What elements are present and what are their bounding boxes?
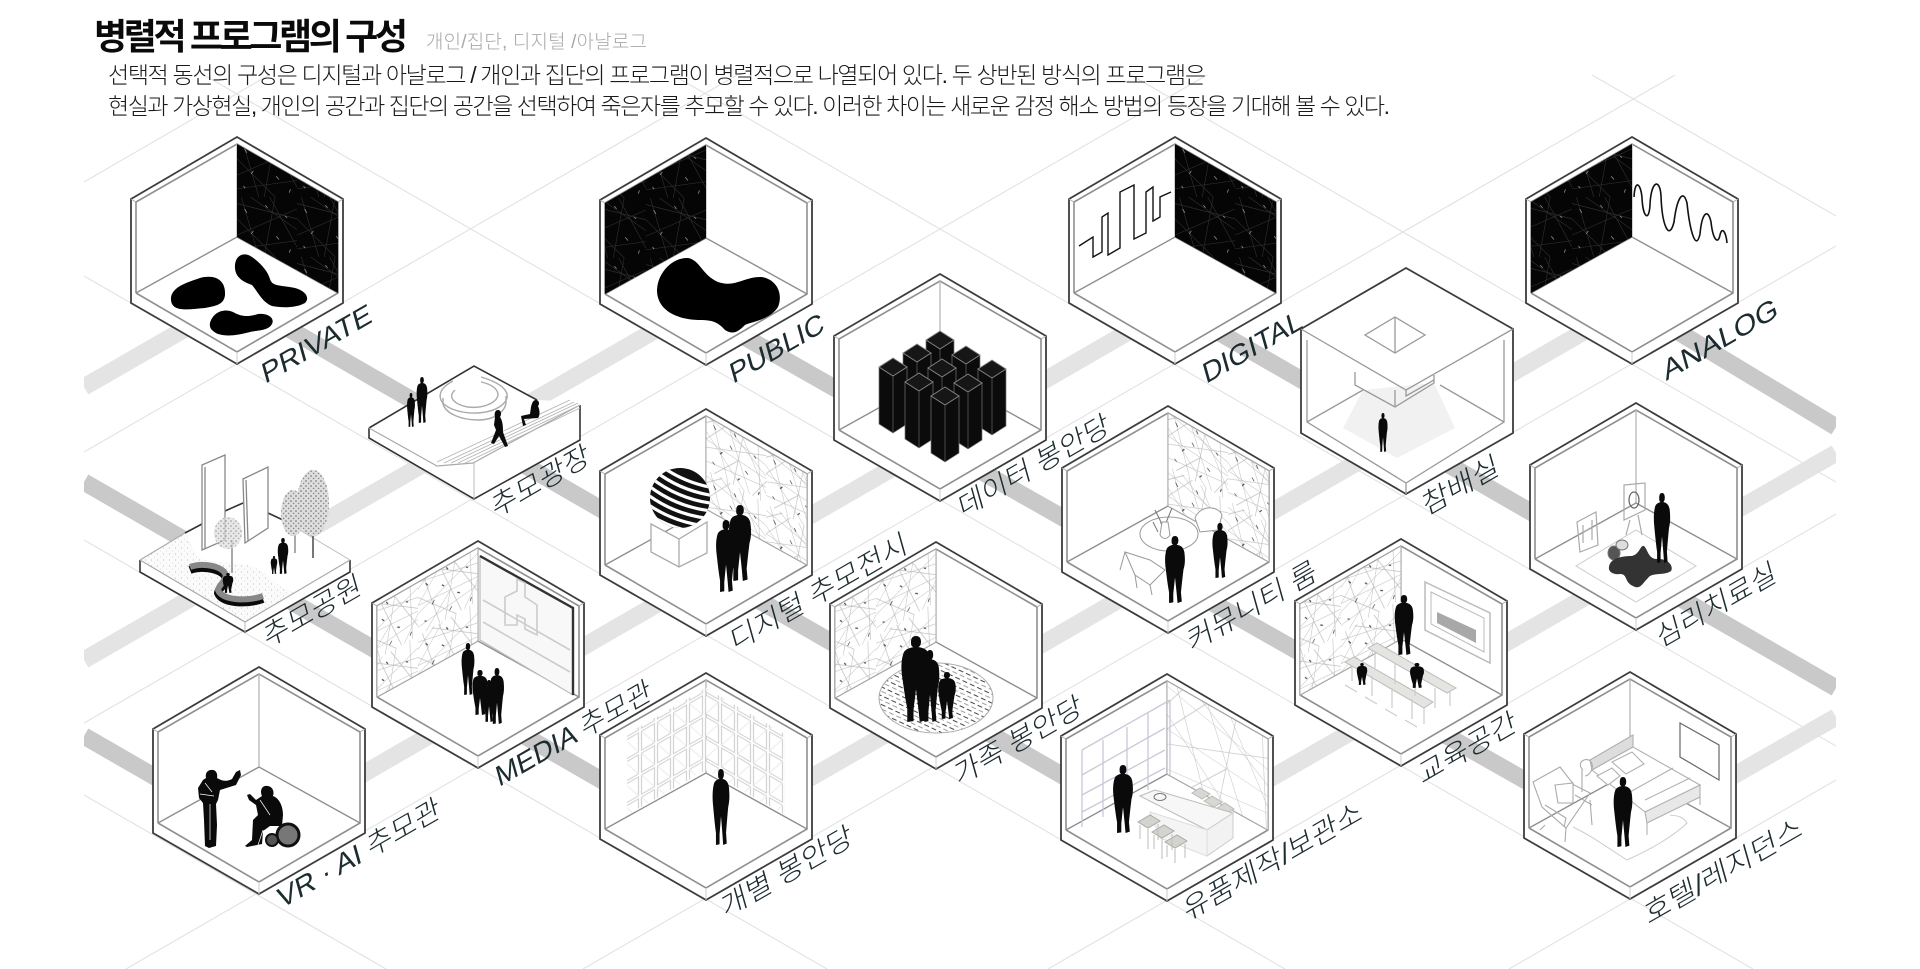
trees [214, 470, 329, 573]
panel: PRIVATE [131, 137, 375, 390]
panel: 호텔/레지던스 [1524, 672, 1806, 931]
ink puddle [1609, 546, 1672, 587]
panel: 추모광장 [369, 366, 593, 524]
panel: 유품제작/보관소 [1061, 674, 1365, 927]
figure: person in wheelchair [245, 786, 299, 847]
furniture [1120, 508, 1222, 595]
description text [108, 62, 1390, 119]
label: 데이터 봉안당 [955, 408, 1113, 524]
curved bench [190, 565, 263, 602]
rug [1573, 815, 1687, 860]
figure [1654, 493, 1670, 563]
media screen [480, 556, 573, 695]
bed [1590, 735, 1700, 835]
patterned floor circle [879, 663, 993, 733]
label: PRIVATE [258, 297, 375, 390]
circulation bands: light, rising to the right [84, 327, 1836, 786]
panel: 추모공원 [140, 455, 365, 654]
rug [1576, 530, 1696, 602]
icon: digital square wave [1079, 185, 1171, 257]
panel: VR · AI 추모관 [153, 667, 444, 915]
label: 커뮤니티 룸 [1184, 554, 1320, 658]
circular monument [440, 377, 507, 420]
label: 심리치료실 [1653, 556, 1779, 654]
figures [407, 377, 540, 447]
figures [1357, 595, 1424, 688]
panel: ANALOG [1526, 137, 1781, 387]
panel: 심리치료실 [1530, 403, 1779, 654]
figures [716, 505, 751, 592]
subtitle: 개인/집단, 디지털 /아날로그 [426, 31, 647, 53]
label: 호텔/레지던스 [1641, 811, 1806, 931]
panel: 교육공간 [1295, 539, 1520, 791]
wall board [1425, 582, 1490, 663]
work table and stools [1138, 788, 1234, 863]
title: 병렬적 프로그램의 구성 [94, 16, 408, 57]
label: 추모광장 [488, 438, 593, 524]
panel: MEDIA 추모관 [372, 541, 655, 793]
panel: 참배실 [1301, 268, 1513, 522]
figures [462, 643, 504, 724]
label: PUBLIC [726, 306, 827, 390]
label: 가족 봉안당 [951, 689, 1085, 792]
figures [901, 636, 956, 722]
label: VR · AI 추모관 [274, 792, 444, 915]
label: ANALOG [1659, 291, 1781, 387]
panel: DIGITAL [1069, 137, 1305, 390]
easel and canvas [1577, 483, 1645, 552]
striped sphere [650, 468, 710, 528]
figures [223, 538, 288, 593]
stairs [437, 400, 580, 463]
panel: 커뮤니티 룸 [1062, 406, 1320, 658]
figure [1113, 765, 1133, 833]
figure [1378, 413, 1388, 452]
figure: standing person with raised arm [198, 770, 241, 848]
panel: PUBLIC [600, 138, 827, 390]
description text: 선택적 동선의 구성은 디지털과 아날로그 / 개인과 집단의 프로그램이 병렬적으로 나열되어 있다. 두 상반된 방식의 프로그램은 [108, 62, 1206, 88]
long tables and chairs [1345, 643, 1456, 727]
label: MEDIA 추모관 [492, 674, 655, 793]
figures [1165, 523, 1228, 603]
pedestal [651, 522, 707, 567]
light cone [1343, 383, 1455, 458]
label: 디지털 추모전시 [727, 527, 911, 658]
icon: analog sine wave [1634, 184, 1727, 243]
panel: 데이터 봉안당 [834, 274, 1113, 524]
label: 교육공간 [1415, 705, 1520, 791]
panel: 디지털 추모전시 [600, 409, 911, 658]
buckets [1608, 540, 1628, 560]
icon: public blob [657, 258, 780, 332]
panel: 가족 봉안당 [830, 542, 1085, 792]
figure [713, 769, 729, 845]
skylight [1365, 317, 1425, 353]
label: DIGITAL [1199, 303, 1305, 390]
niche wall grid [627, 688, 785, 815]
description text: 현실과 가상현실, 개인의 공간과 집단의 공간을 선택하여 죽은자를 추모할 수 있다. 이러한 차이는 새로운 감정 해소 방법의 등장을 기대해 볼 수 있다. [108, 93, 1390, 119]
armchair and side table [1533, 760, 1592, 842]
memorial slabs [202, 455, 268, 550]
label: 개별 봉안당 [718, 819, 856, 924]
label: 추모공원 [260, 568, 365, 654]
icon: black data columns [879, 331, 1006, 462]
wall picture [1680, 723, 1719, 780]
icon: private blobs [171, 254, 307, 335]
circulation bands: dark, falling to the right [84, 327, 1836, 789]
panel: 개별 봉안당 [600, 673, 856, 924]
label: 유품제작/보관소 [1180, 795, 1365, 927]
shelves [1082, 700, 1170, 827]
label: 참배실 [1419, 449, 1502, 522]
figure [1614, 777, 1632, 847]
